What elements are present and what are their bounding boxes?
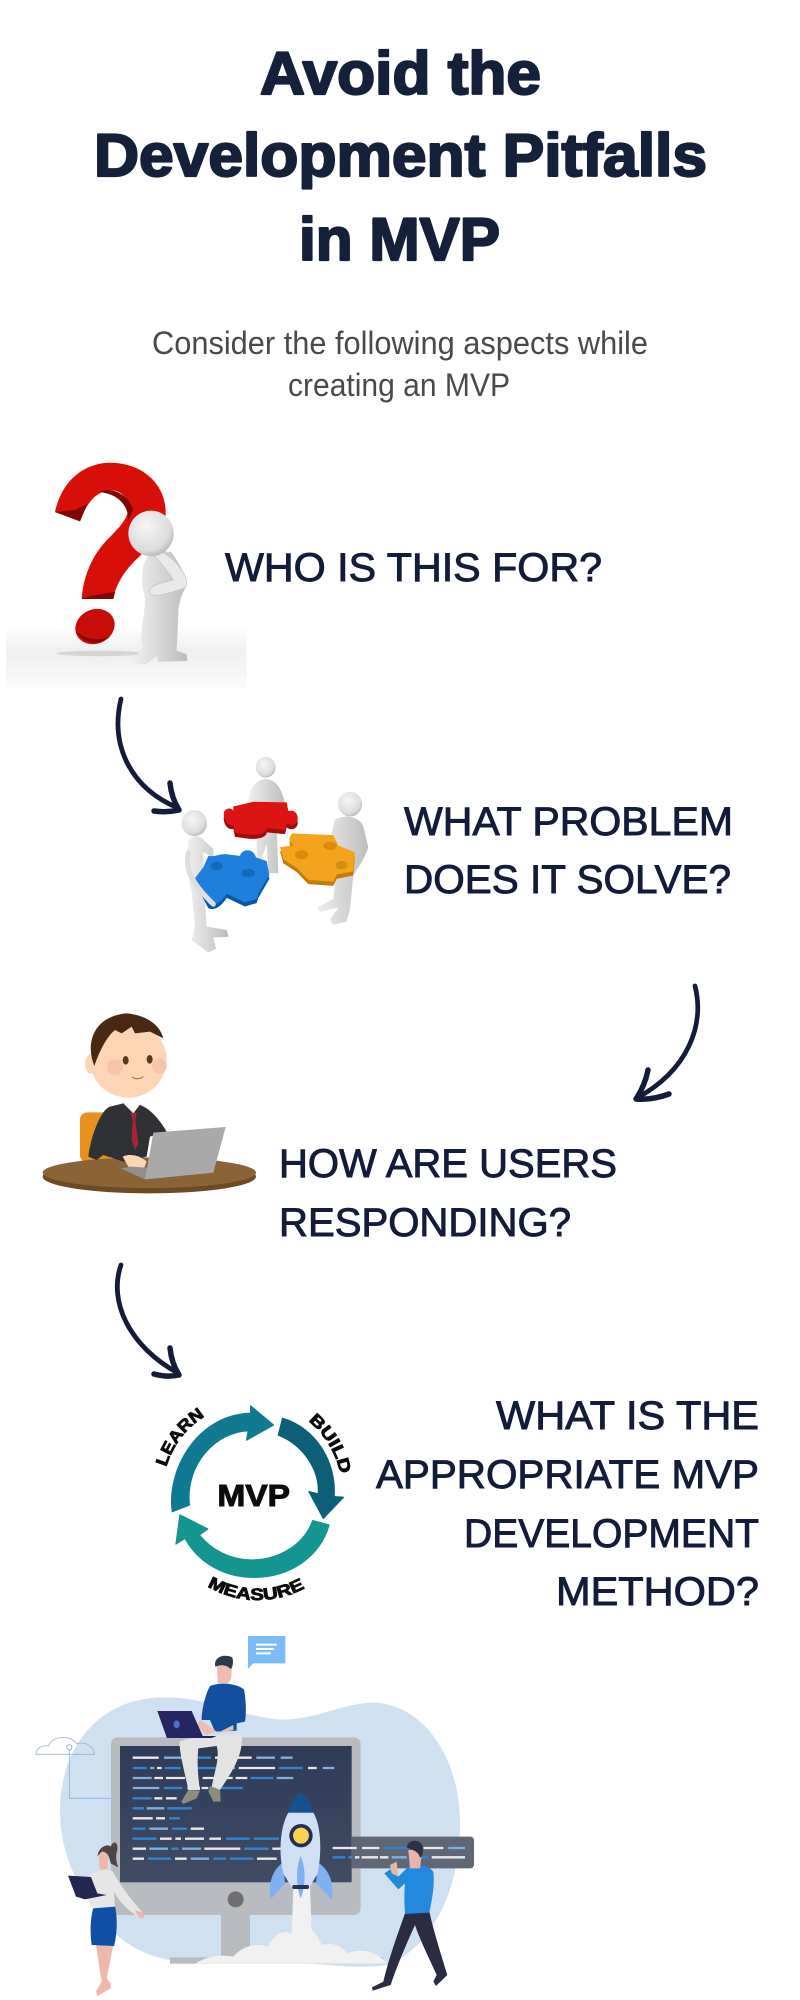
laptop and hand xyxy=(121,1127,226,1179)
monitor xyxy=(111,1737,383,1964)
heading: appropriate MVP development method xyxy=(376,1394,759,1614)
chair xyxy=(80,1112,112,1162)
code lines xyxy=(133,1758,334,1859)
arrow: users to method xyxy=(117,1265,179,1376)
heading: what problem does it solve: DOES IT SOLVE? xyxy=(404,858,731,902)
icon: people assembling puzzle xyxy=(182,757,368,952)
icon: MVP cycle xyxy=(155,1405,350,1601)
measure label: MEASURE xyxy=(208,1576,305,1601)
arrow: who to problem xyxy=(118,699,179,812)
heading: appropriate MVP development method: APPROPRIATE MVP xyxy=(376,1453,759,1497)
heading: how are users responding: HOW ARE USERS xyxy=(279,1142,617,1186)
heading: appropriate MVP development method: WHAT IS THE xyxy=(496,1394,759,1438)
measure arrow xyxy=(176,1515,329,1577)
right figure xyxy=(317,792,368,925)
heading: appropriate MVP development method: DEVELOPMENT xyxy=(464,1512,759,1556)
MVP label: MVP xyxy=(217,1479,290,1513)
build arrow xyxy=(278,1418,343,1518)
shirt and tie xyxy=(124,1095,139,1150)
learn label: LEARN xyxy=(155,1407,204,1466)
subtitle xyxy=(152,325,648,403)
rocket xyxy=(270,1793,333,1899)
head xyxy=(85,1013,167,1098)
person: top with laptop xyxy=(157,1656,246,1804)
title: in MVP xyxy=(299,206,500,273)
heading: how are users responding xyxy=(279,1142,617,1245)
icon: figure with question mark xyxy=(6,463,247,689)
person: woman with laptop xyxy=(68,1843,144,1996)
title xyxy=(94,40,707,273)
icon: man working on laptop xyxy=(43,1013,256,1193)
code panel xyxy=(333,1837,474,1868)
red puzzle piece xyxy=(224,802,298,839)
left figure xyxy=(182,810,229,952)
blue puzzle piece xyxy=(187,850,269,909)
build label: BUILD xyxy=(308,1412,350,1472)
subtitle: Consider the following aspects while xyxy=(152,325,648,361)
smoke xyxy=(195,1887,387,1964)
arrow: problem to users xyxy=(636,986,698,1099)
background blob xyxy=(60,1697,460,1967)
heading: who is this for: WHO IS THIS FOR? xyxy=(225,546,602,590)
suit xyxy=(88,1103,167,1162)
heading: how are users responding: RESPONDING? xyxy=(279,1201,571,1245)
learn arrow xyxy=(172,1406,273,1512)
cloud with connector xyxy=(36,1737,135,1798)
heading: what problem does it solve xyxy=(404,800,733,902)
person: man with phone xyxy=(372,1841,447,1991)
subtitle: creating an MVP xyxy=(288,367,510,403)
title: Avoid the xyxy=(260,40,541,107)
back figure xyxy=(248,757,285,873)
orange puzzle piece xyxy=(280,833,355,886)
illustration: team launching product xyxy=(36,1636,474,1996)
title: Development Pitfalls xyxy=(94,122,707,189)
heading: appropriate MVP development method: METHOD? xyxy=(556,1570,759,1614)
table xyxy=(43,1157,256,1193)
heading: what problem does it solve: WHAT PROBLEM xyxy=(404,800,733,844)
speech bubble xyxy=(248,1636,285,1669)
